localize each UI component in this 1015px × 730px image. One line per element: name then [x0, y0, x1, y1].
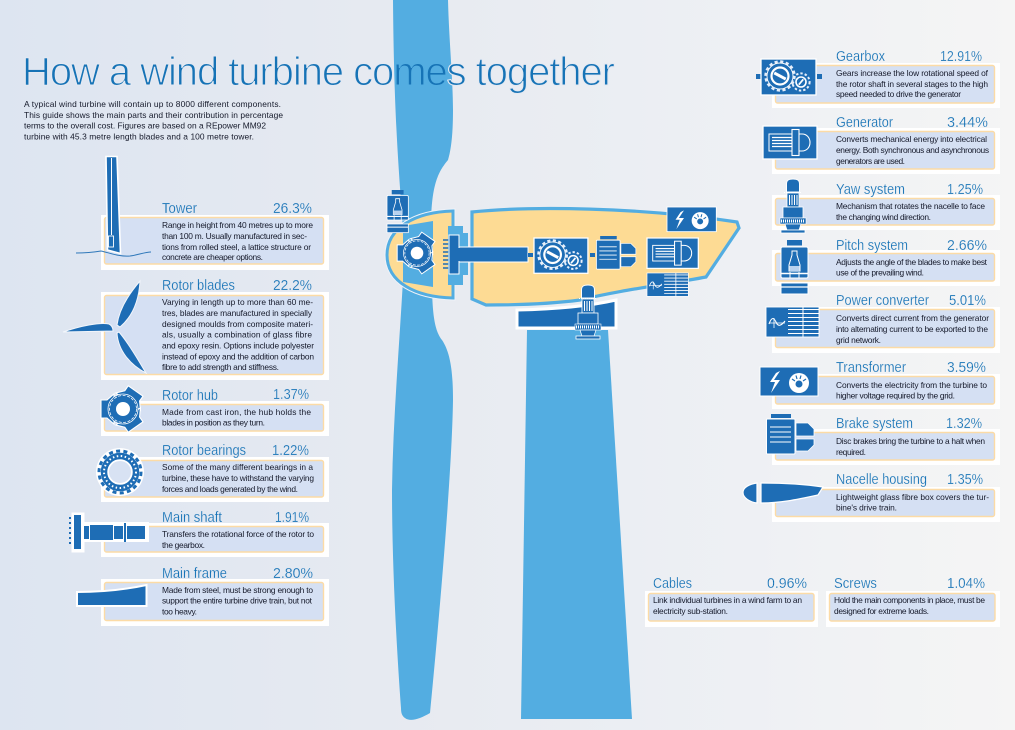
main frame: [517, 300, 616, 328]
description: [162, 407, 311, 428]
description: concrete are cheaper options.: [162, 252, 263, 262]
description: [836, 492, 989, 512]
panel: main shaft: [70, 509, 329, 557]
icon: main shaft: [70, 512, 149, 552]
description: Converts direct current from the generator: [836, 313, 989, 323]
percentage: 1.25%: [947, 181, 983, 198]
description: bine's drive train.: [836, 502, 897, 512]
description: and epoxy resin. Options include polyester: [162, 340, 314, 350]
percentage: 1.04%: [947, 575, 985, 592]
bearing flange: [448, 226, 468, 285]
description: than 100 m. Usually manufactured in sec-: [162, 231, 307, 241]
spinner housing: [387, 211, 453, 298]
description: Varying in length up to more than 60 me-: [162, 297, 313, 307]
percentage: 2.66%: [947, 237, 987, 254]
description: [162, 462, 314, 494]
intro text: A typical wind turbine will contain up to 8000 different components.: [24, 99, 281, 109]
heading: Rotor hub: [162, 387, 218, 404]
central turbine diagram: [387, 0, 739, 720]
icon: pitch system: [781, 240, 808, 294]
intro text: terms to the overall cost. Figures are based on a REpower MM92: [24, 120, 266, 130]
panel: yaw system: [772, 179, 1000, 233]
description: Hold the main components in place, must be: [834, 595, 985, 605]
description: too heavy.: [162, 606, 197, 616]
description: Made from steel, must be strong enough to: [162, 585, 313, 595]
description: Adjusts the angle of the blades to make best: [836, 257, 988, 267]
percentage: 1.91%: [275, 509, 309, 526]
icon: rotor blades: [63, 281, 146, 373]
description: [162, 529, 314, 550]
description: Converts the electricity from the turbine to: [836, 380, 987, 390]
icon: main frame: [77, 585, 146, 606]
panel: screws: [826, 575, 1000, 627]
description: support the entire turbine drive train, but not: [162, 596, 313, 606]
description: higher voltage required by the grid.: [836, 390, 955, 400]
title: How a wind turbine comes together: [22, 50, 615, 94]
description: instead of epoxy and the addition of carbon: [162, 352, 314, 362]
description: blades in position as they turn.: [162, 418, 265, 428]
percentage: 1.22%: [272, 442, 309, 459]
description: [834, 595, 985, 616]
heading: Rotor blades: [162, 277, 235, 294]
brake system: [596, 236, 636, 269]
icon: power converter: [766, 307, 819, 337]
power converter: [647, 273, 688, 296]
description: als, usually a combination of glass fibre: [162, 330, 312, 340]
description: generators are used.: [836, 156, 905, 166]
heading: Generator: [836, 114, 893, 131]
description: the rotor shaft in several stages to the high: [836, 79, 988, 89]
icon: rotor hub: [101, 382, 148, 436]
description: [162, 297, 314, 372]
heading: Brake system: [836, 415, 913, 432]
intro text: [24, 99, 283, 142]
heading: Nacelle housing: [836, 471, 927, 488]
icon: transformer: [760, 367, 818, 396]
heading: Power converter: [836, 292, 929, 309]
description: [836, 436, 985, 457]
percentage: 1.35%: [947, 471, 983, 488]
description: tres, blades are manufactured in specially: [162, 308, 313, 318]
panel: power converter: [766, 292, 1000, 353]
panel: brake system: [766, 414, 1000, 465]
description: [836, 380, 987, 400]
percentage: 5.01%: [949, 292, 986, 309]
icon: yaw system: [780, 179, 806, 233]
percentage: 2.80%: [273, 565, 313, 582]
generator: [647, 238, 698, 268]
heading: Gearbox: [836, 48, 885, 65]
intro text: turbine with 45.3 metre length blades and a 100 metre tower.: [24, 132, 254, 142]
percentage: 12.91%: [940, 48, 982, 65]
description: Transfers the rotational force of the rotor to: [162, 529, 314, 539]
description: [836, 257, 988, 278]
panel: tower: [76, 156, 329, 270]
heading: Main frame: [162, 565, 227, 582]
description: [836, 313, 989, 345]
description: [653, 595, 802, 616]
description: the changing wind direction.: [836, 212, 931, 222]
yaw system: [575, 285, 601, 339]
description: Link individual turbines in a wind farm to an: [653, 595, 802, 605]
panel: pitch system: [772, 237, 1000, 294]
percentage: 1.37%: [273, 386, 309, 403]
heading: Yaw system: [836, 181, 905, 198]
description: designed moulds from composite materi-: [162, 319, 313, 329]
panel: main frame: [77, 565, 329, 626]
icon: rotor bearings: [96, 448, 144, 496]
panel: nacelle housing: [743, 471, 1000, 522]
icon: tower: [76, 156, 151, 256]
heading: Transformer: [836, 359, 906, 376]
description: Some of the many different bearings in a: [162, 462, 313, 472]
description: tions from rolled steel, a lattice structure or: [162, 242, 311, 252]
description: forces and loads generated by the wind.: [162, 484, 298, 494]
heading: Main shaft: [162, 509, 223, 526]
percentage: 3.44%: [947, 114, 988, 131]
nacelle housing: [472, 209, 739, 305]
description: turbine, these have to withstand the varying: [162, 473, 314, 483]
lower blade: [392, 280, 453, 720]
description: Disc brakes bring the turbine to a halt when: [836, 436, 985, 446]
percentage: 0.96%: [767, 575, 807, 592]
description: Range in height from 40 metres up to more: [162, 220, 313, 230]
description: [162, 585, 313, 616]
description: [836, 201, 985, 222]
icon: generator: [763, 126, 817, 159]
description: required.: [836, 447, 866, 457]
description: grid network.: [836, 335, 881, 345]
description: electricity sub-station.: [653, 606, 728, 616]
tower: [521, 330, 632, 719]
description: Made from cast iron, the hub holds the: [162, 407, 311, 417]
heading: Tower: [162, 200, 197, 217]
heading: Cables: [653, 575, 692, 592]
transformer: [667, 207, 716, 232]
description: speed needed to drive the generator: [836, 89, 961, 99]
rotor hub: [397, 229, 439, 277]
panel: cables: [645, 575, 818, 627]
description: Gears increase the low rotational speed of: [836, 68, 989, 78]
icon: gearbox: [756, 59, 822, 95]
percentage: 1.32%: [946, 415, 982, 432]
gearbox: [534, 238, 588, 273]
panel: rotor bearings: [96, 442, 329, 502]
panel: transformer: [760, 359, 1000, 409]
description: the gearbox.: [162, 540, 205, 550]
description: [836, 134, 989, 166]
heading: Screws: [834, 575, 877, 592]
description: [162, 220, 313, 262]
description: [836, 68, 989, 99]
icon: brake system: [766, 414, 814, 454]
icon: nacelle housing: [743, 483, 823, 503]
description: use of the prevailing wind.: [836, 268, 924, 278]
intro text: This guide shows the main parts and their contribution in percentage: [24, 110, 283, 120]
description: Converts mechanical energy into electrical: [836, 134, 987, 144]
description: energy. Both synchronous and asynchronous: [836, 145, 989, 155]
upper blade: [393, 0, 453, 230]
percentage: 22.2%: [273, 277, 312, 294]
description: fibre to add strength and stiffness.: [162, 362, 279, 372]
description: Mechanism that rotates the nacelle to face: [836, 201, 985, 211]
panel: gearbox: [756, 48, 1000, 108]
panel: generator: [763, 114, 1000, 174]
percentage: 26.3%: [273, 200, 312, 217]
main shaft: [443, 235, 595, 274]
description: designed for extreme loads.: [834, 606, 929, 616]
percentage: 3.59%: [947, 359, 986, 376]
pitch system: [387, 190, 408, 233]
description: Lightweight glass fibre box covers the tur-: [836, 492, 989, 502]
panel: rotor blades: [63, 277, 329, 380]
panel: rotor hub: [101, 382, 329, 436]
heading: Rotor bearings: [162, 442, 246, 459]
description: into alternating current to be exported to the: [836, 324, 988, 334]
heading: Pitch system: [836, 237, 908, 254]
